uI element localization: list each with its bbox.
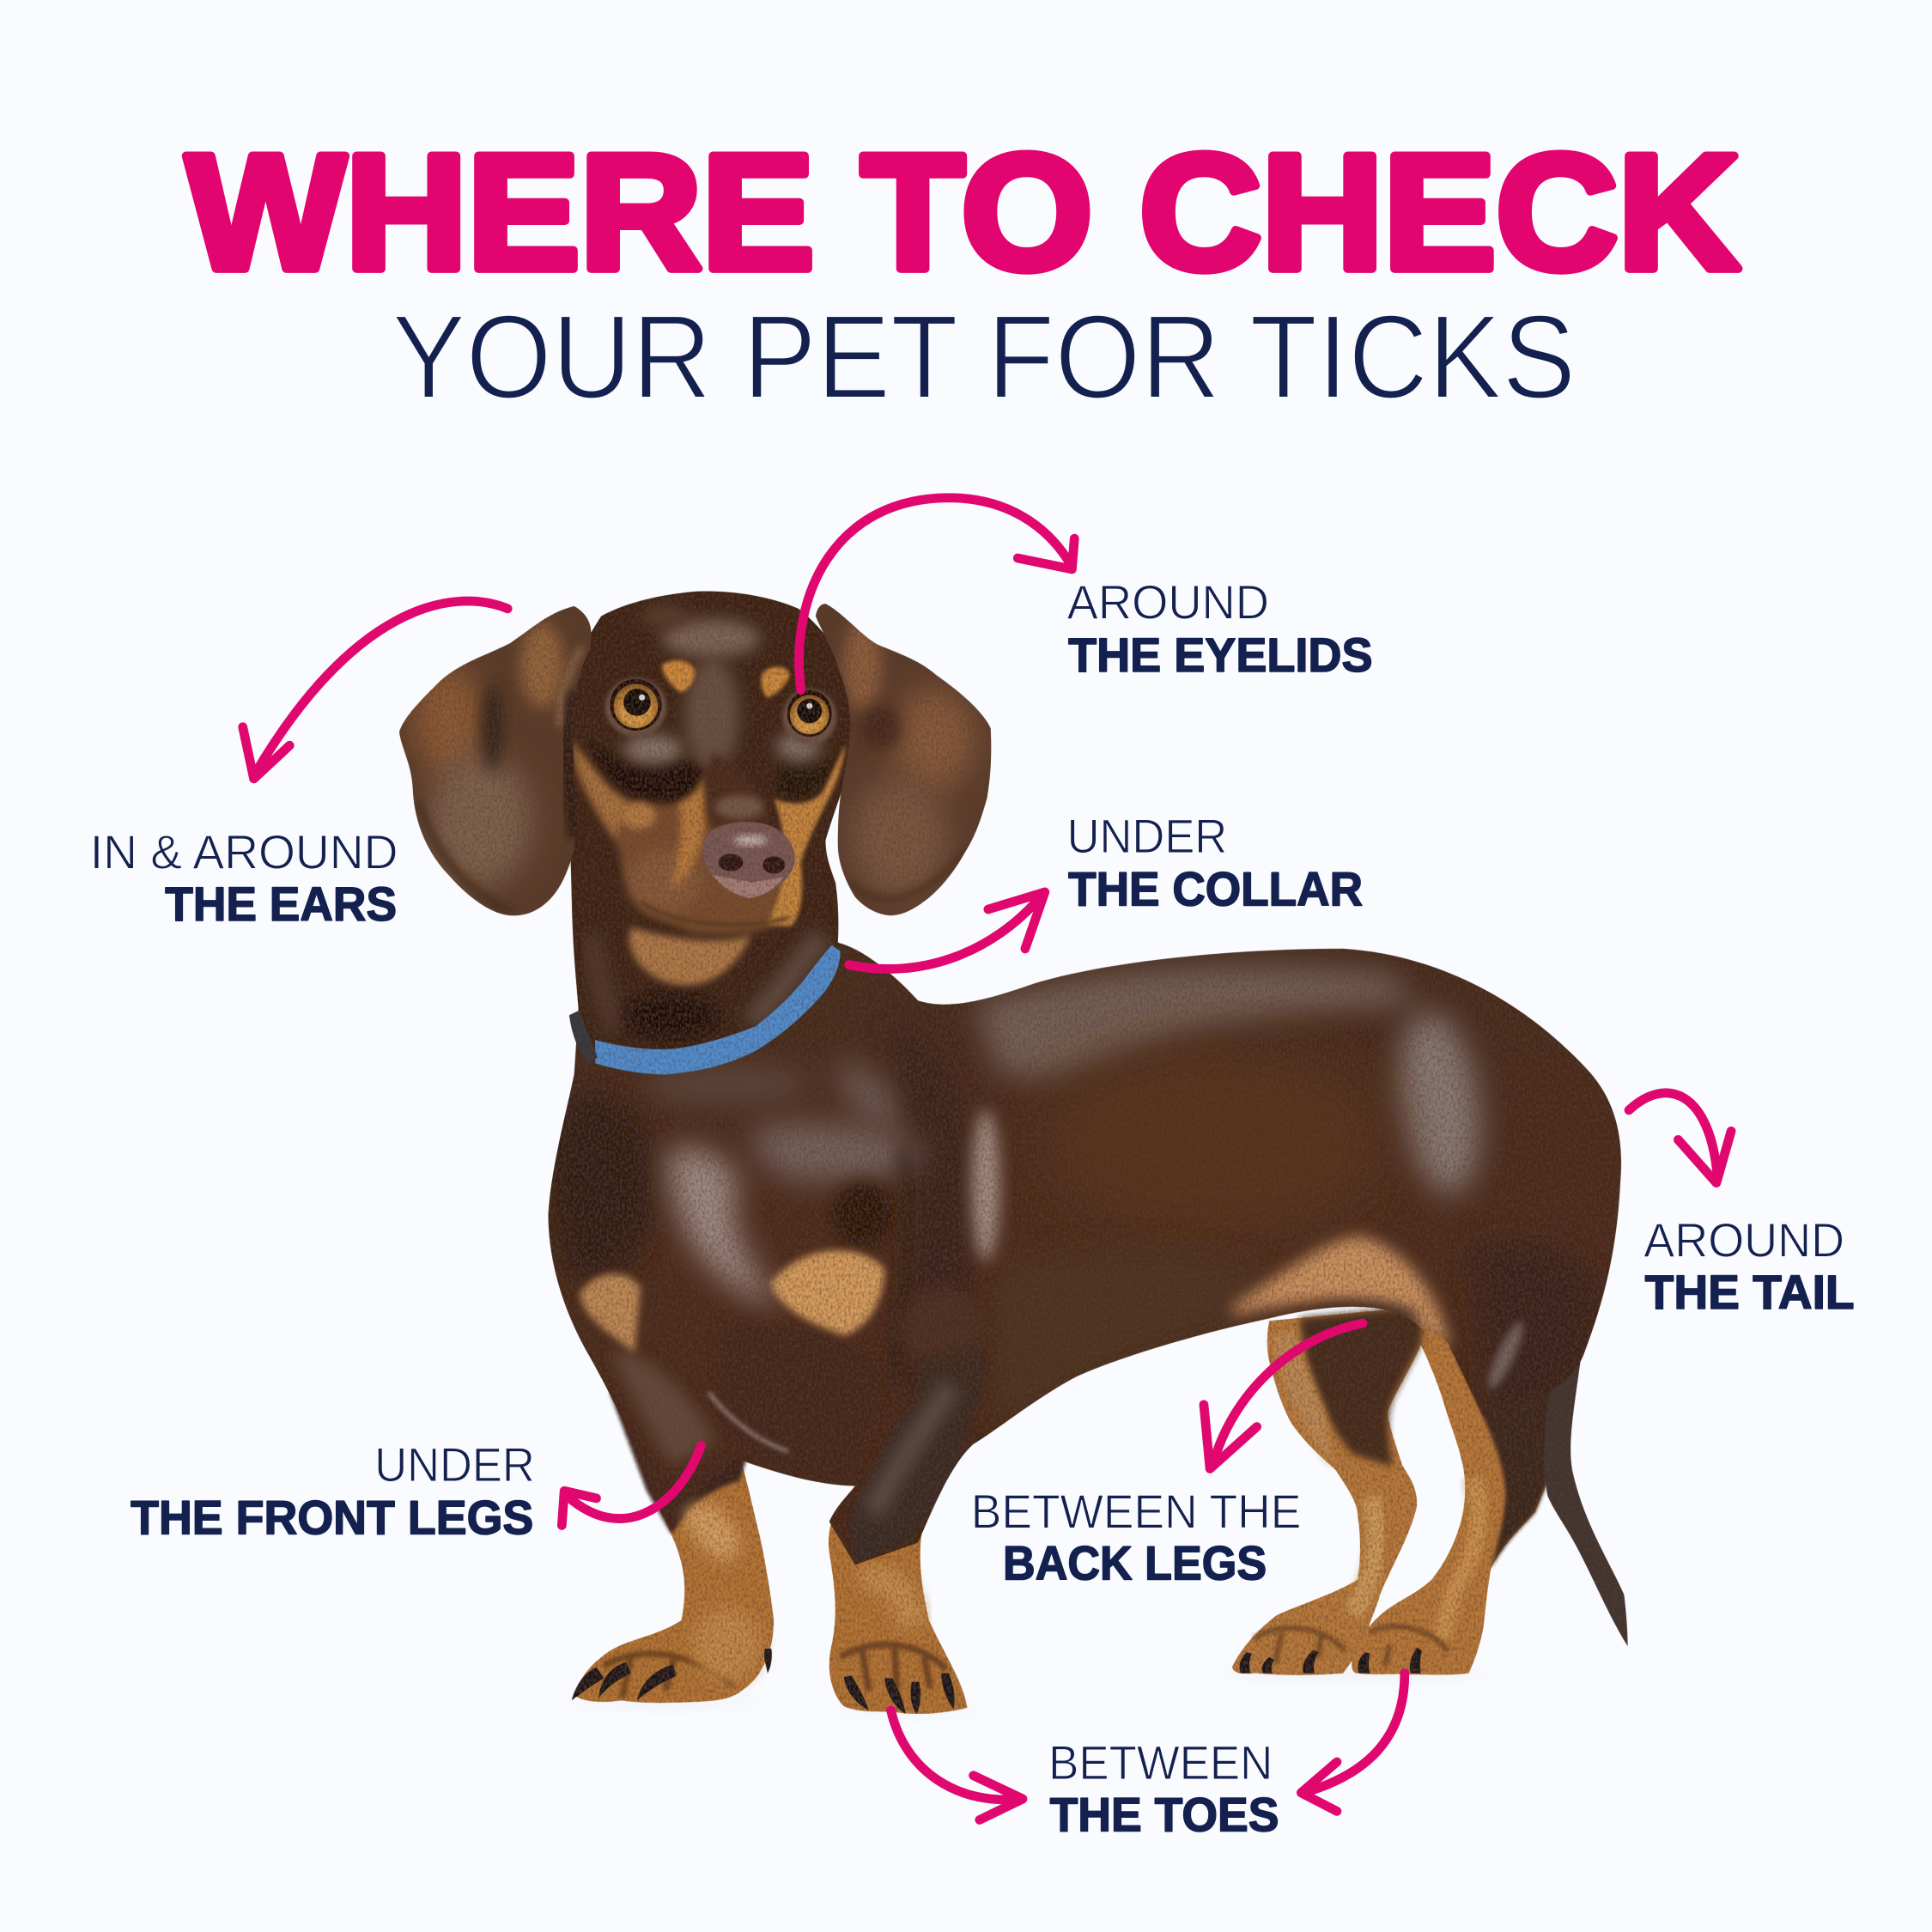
claws, near hind paw bbox=[1240, 1649, 1318, 1674]
torso bbox=[530, 924, 1638, 1577]
eye right bbox=[782, 689, 836, 745]
label: in and around the ears bbox=[90, 825, 398, 931]
chin bbox=[629, 927, 751, 986]
right cheek tan bbox=[767, 744, 845, 927]
elbow bbox=[901, 1286, 985, 1375]
label: under the collar: THE COLLAR bbox=[1068, 862, 1363, 916]
lower flank bbox=[986, 1249, 1281, 1430]
front leg, left bbox=[572, 1392, 774, 1703]
hind leg, far bbox=[1352, 1294, 1577, 1674]
neck streaks bbox=[751, 937, 823, 1023]
ear left bbox=[394, 601, 598, 921]
subtitle: YOUR PET FOR TICKS bbox=[392, 290, 1576, 423]
rump shade bbox=[1467, 1240, 1601, 1430]
nose bbox=[702, 822, 795, 898]
arrow: ears bbox=[243, 601, 507, 779]
title: WHERE TO CHECK bbox=[186, 121, 1740, 304]
label: between the back legs: BACK LEGS bbox=[1003, 1536, 1267, 1590]
arrow: eyelids bbox=[799, 498, 1074, 690]
muzzle bridge bbox=[705, 751, 771, 828]
claws, far hind paw bbox=[1358, 1648, 1422, 1674]
neck dark bbox=[625, 994, 719, 1039]
shoulder sheen under collar bbox=[833, 1063, 914, 1129]
under-eye light left bbox=[623, 734, 683, 764]
collar buckle bbox=[569, 1011, 598, 1065]
label: around the tail: THE TAIL bbox=[1645, 1265, 1855, 1319]
flank warm tone bbox=[1042, 1048, 1386, 1232]
shoulder edge streak bbox=[893, 1146, 908, 1368]
under-eye light right bbox=[776, 732, 821, 762]
arrow: front legs bbox=[562, 1445, 701, 1525]
label: under the collar bbox=[1067, 809, 1363, 916]
hip sheen bbox=[1388, 1005, 1491, 1200]
tan chest patch bbox=[770, 1250, 884, 1335]
label: between the toes bbox=[1048, 1735, 1279, 1841]
label: around the tail: AROUND bbox=[1643, 1213, 1844, 1267]
claws, left front paw bbox=[572, 1649, 772, 1700]
label: around the tail bbox=[1643, 1213, 1855, 1319]
arrow: tail bbox=[1629, 1093, 1731, 1183]
tan chest patch, left bbox=[579, 1273, 641, 1353]
back sheen bbox=[974, 965, 1417, 1079]
collar bbox=[569, 945, 841, 1074]
arrow: toes right bbox=[1301, 1674, 1405, 1811]
label: under the front legs: THE FRONT LEGS bbox=[131, 1491, 533, 1545]
neck and head bbox=[555, 579, 862, 1084]
tail bbox=[1544, 1349, 1628, 1646]
dark eye mask left bbox=[589, 739, 705, 801]
label: in and around the ears: IN & AROUND bbox=[90, 825, 398, 879]
shoulder dark bbox=[887, 1023, 971, 1392]
label: under the front legs bbox=[131, 1437, 535, 1545]
label: around the eyelids: AROUND bbox=[1067, 574, 1269, 629]
label: between the toes: BETWEEN bbox=[1048, 1735, 1273, 1789]
eye left bbox=[605, 677, 666, 737]
label: around the eyelids: THE EYELIDS bbox=[1068, 628, 1373, 682]
label: in and around the ears: THE EARS bbox=[165, 877, 397, 931]
chest highlights bbox=[665, 1147, 782, 1309]
lower face brown bbox=[629, 849, 702, 913]
arrow: back legs bbox=[1204, 1323, 1363, 1468]
left edge tan bbox=[569, 739, 629, 838]
label: between the back legs: BETWEEN THE bbox=[971, 1484, 1301, 1538]
dark forearm bbox=[848, 1337, 988, 1564]
arrow: collar bbox=[849, 892, 1045, 969]
forehead light bbox=[662, 618, 760, 658]
thigh tan bbox=[1232, 1236, 1451, 1349]
chest shade left bbox=[549, 1094, 656, 1288]
floor shadows bbox=[567, 1667, 1491, 1715]
dark patch above tan bbox=[833, 1182, 892, 1246]
left muzzle tan marks bbox=[671, 774, 707, 890]
muzzle and left cheek tan bbox=[570, 753, 795, 934]
dark eye mask right bbox=[776, 757, 841, 797]
left underchest bbox=[611, 1351, 717, 1467]
label: around the eyelids bbox=[1067, 574, 1373, 682]
arrow: toes left bbox=[890, 1710, 1023, 1820]
hind leg, near bbox=[1232, 1306, 1425, 1675]
lower chest bbox=[722, 1322, 873, 1481]
label: under the collar: UNDER bbox=[1067, 809, 1227, 863]
claws, right front paw bbox=[844, 1674, 955, 1714]
eyebrow left bbox=[662, 660, 695, 692]
front leg, right bbox=[829, 1479, 967, 1714]
label: between the back legs bbox=[971, 1484, 1301, 1590]
thigh fold bbox=[1305, 1303, 1419, 1334]
rump highlight bbox=[1482, 1318, 1529, 1393]
eyebrow right bbox=[761, 666, 790, 697]
illustration: dachshund bbox=[394, 579, 1638, 1714]
label: under the front legs: UNDER bbox=[374, 1437, 535, 1492]
lip line bbox=[641, 902, 788, 925]
label: between the toes: THE TOES bbox=[1050, 1787, 1279, 1841]
ear right bbox=[813, 598, 998, 920]
